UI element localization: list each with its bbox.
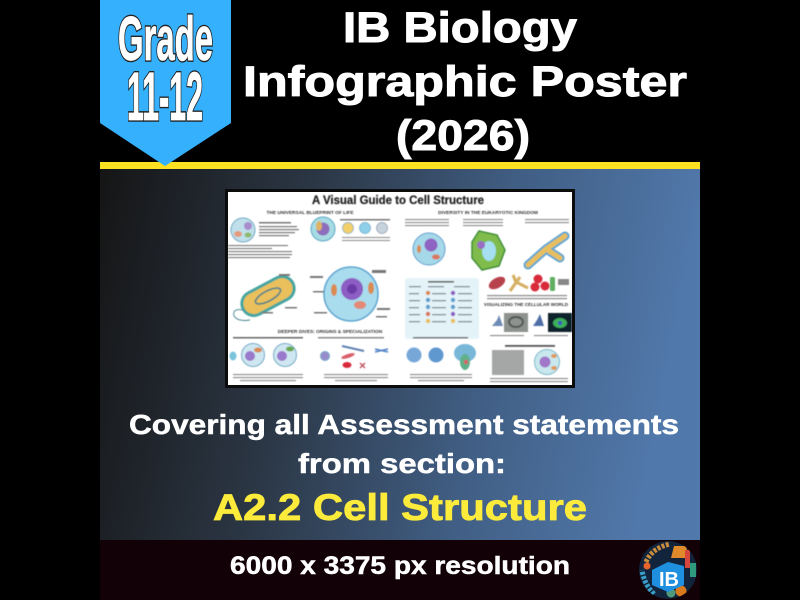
atypical cells xyxy=(487,274,569,292)
title: Infographic Poster xyxy=(243,58,687,106)
illustration: animal cell xyxy=(413,233,445,265)
diagram cell xyxy=(534,350,560,374)
grade badge: Grade xyxy=(118,4,213,74)
text block: prokaryotes xyxy=(228,245,292,258)
title: (2026) xyxy=(396,112,530,160)
illustration: eukaryotic cell xyxy=(324,267,378,321)
footer bar xyxy=(100,540,700,600)
resolution label: 6000 x 3375 px resolution xyxy=(230,552,570,580)
text block: basic unit xyxy=(259,222,299,236)
micrograph xyxy=(492,350,524,375)
section heading: universal blueprint: THE UNIVERSAL BLUEPRINT OF LIFE xyxy=(266,210,354,216)
core components icons xyxy=(340,219,390,241)
section heading: eukaryotic diversity: DIVERSITY IN THE EUKARYOTIC KINGDOM xyxy=(438,210,538,216)
illustration: plant cell xyxy=(472,231,505,270)
title: IB Biology xyxy=(343,4,577,52)
heading text lines: eukaryote columns xyxy=(405,219,569,226)
heading: visualizing the cellular world: VISUALIZING THE CELLULAR WORLD xyxy=(484,302,569,307)
IB logo xyxy=(639,541,697,599)
header band xyxy=(100,0,700,162)
title xyxy=(243,4,687,160)
caption: microscopy xyxy=(490,378,568,382)
endosymbiotic theory xyxy=(230,337,303,381)
icon: round cell xyxy=(231,218,255,242)
icon: core component cell xyxy=(311,217,335,241)
poster title: A Visual Guide to Cell Structure xyxy=(312,195,484,207)
cell labels xyxy=(262,270,390,318)
evolution of multicellularity xyxy=(406,337,476,381)
grade badge xyxy=(100,0,231,166)
illustration: fungal cell xyxy=(528,236,565,265)
subtitle: Covering all Assessment statements xyxy=(129,409,679,440)
main gradient panel xyxy=(100,169,700,540)
subtitle xyxy=(129,409,679,479)
grade badge: 11-12 xyxy=(127,59,203,136)
panel: key distinctions xyxy=(405,278,479,339)
IB logo: IB xyxy=(659,569,679,591)
poster preview xyxy=(225,189,575,388)
yellow divider xyxy=(100,162,700,169)
microscopy images xyxy=(490,313,572,336)
grade badge: 11-12 xyxy=(127,59,203,136)
cell differentiation xyxy=(318,337,388,381)
text block: atypical cells xyxy=(487,295,567,299)
grade badge: Grade xyxy=(118,4,213,74)
section name: A2.2 Cell Structure xyxy=(213,487,587,528)
subtitle: from section: xyxy=(298,448,506,479)
illustration: bacterium xyxy=(234,272,298,320)
heading: micrograph to diagram xyxy=(505,345,555,347)
heading: deeper dives: DEEPER DIVES: ORIGINS & SPECIALIZATION xyxy=(278,329,383,335)
